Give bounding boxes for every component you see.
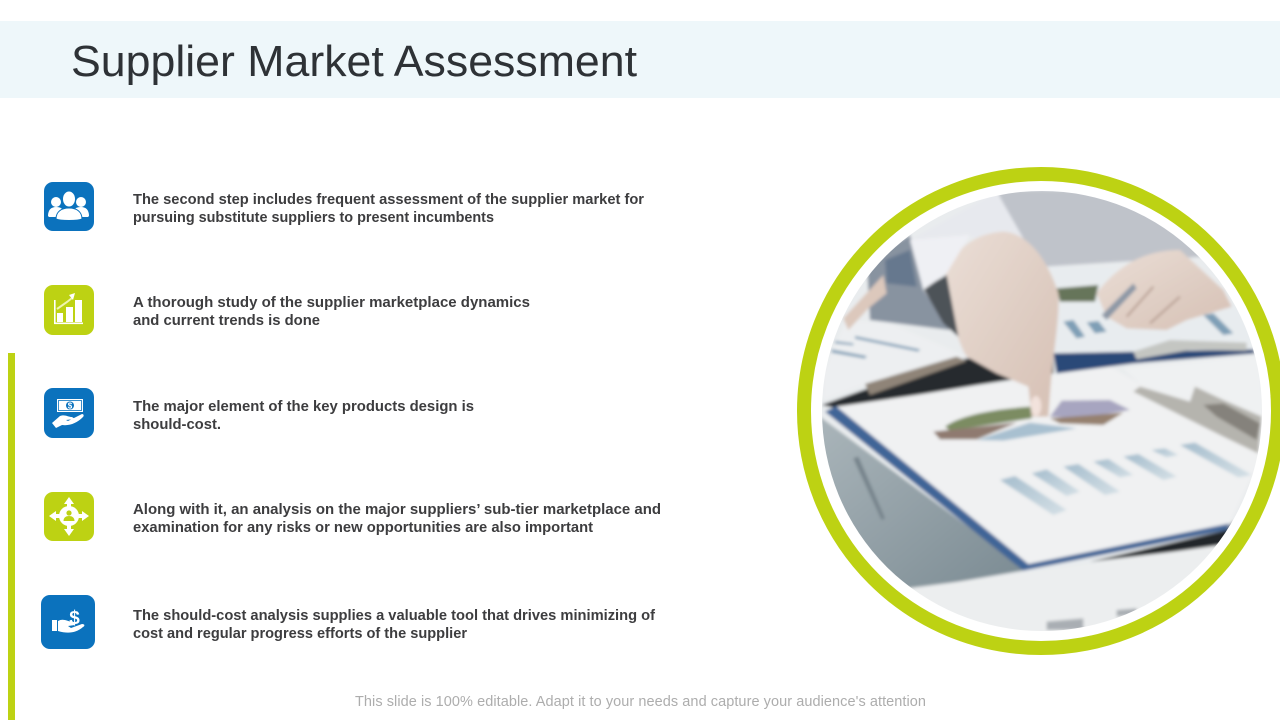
icon: person with four arrows (44, 492, 94, 541)
header band (0, 21, 1280, 98)
text: item 4: examination for any risks or new opportunities are also important (133, 519, 593, 536)
icon: rising bar chart (44, 285, 94, 335)
icon: hand with dollar sign: $ (69, 608, 80, 629)
item 4: sub-tier analysis (44, 492, 661, 541)
item 5: should-cost tool (41, 595, 656, 649)
text: item 3: should-cost. (133, 416, 221, 433)
text: item 2: and current trends is done (133, 312, 320, 329)
text: item 4: Along with it, an analysis on the major suppliers’ sub-tier marketplace and (133, 501, 661, 518)
item 2: marketplace dynamics (44, 285, 530, 335)
text: item 5: The should-cost analysis supplies a valuable tool that drives minimizing of (133, 607, 656, 624)
ring around photo (804, 174, 1278, 648)
text: item 5: cost and regular progress efforts of the supplier (133, 625, 467, 642)
text: item 2: A thorough study of the supplier marketplace dynamics (133, 294, 530, 311)
icon: group of people (44, 182, 94, 231)
text: item 1: The second step includes frequent assessment of the supplier market for (133, 191, 644, 208)
icon: hand holding banknote: $ (68, 402, 73, 410)
item 1: supplier market (44, 182, 644, 231)
text: item 1: pursuing substitute suppliers to present incumbents (133, 209, 494, 226)
photo: hands reviewing charts on clipboards (822, 191, 1262, 631)
item 3: should-cost design (44, 388, 474, 438)
footer note: This slide is 100% editable. Adapt it to your needs and capture your audience's attention (355, 694, 926, 710)
left accent bar (8, 353, 15, 720)
icon: hand with dollar sign (41, 595, 95, 649)
title: Supplier Market Assessment (71, 37, 637, 86)
text: item 3: The major element of the key products design is (133, 398, 474, 415)
icon: hand holding banknote (44, 388, 94, 438)
